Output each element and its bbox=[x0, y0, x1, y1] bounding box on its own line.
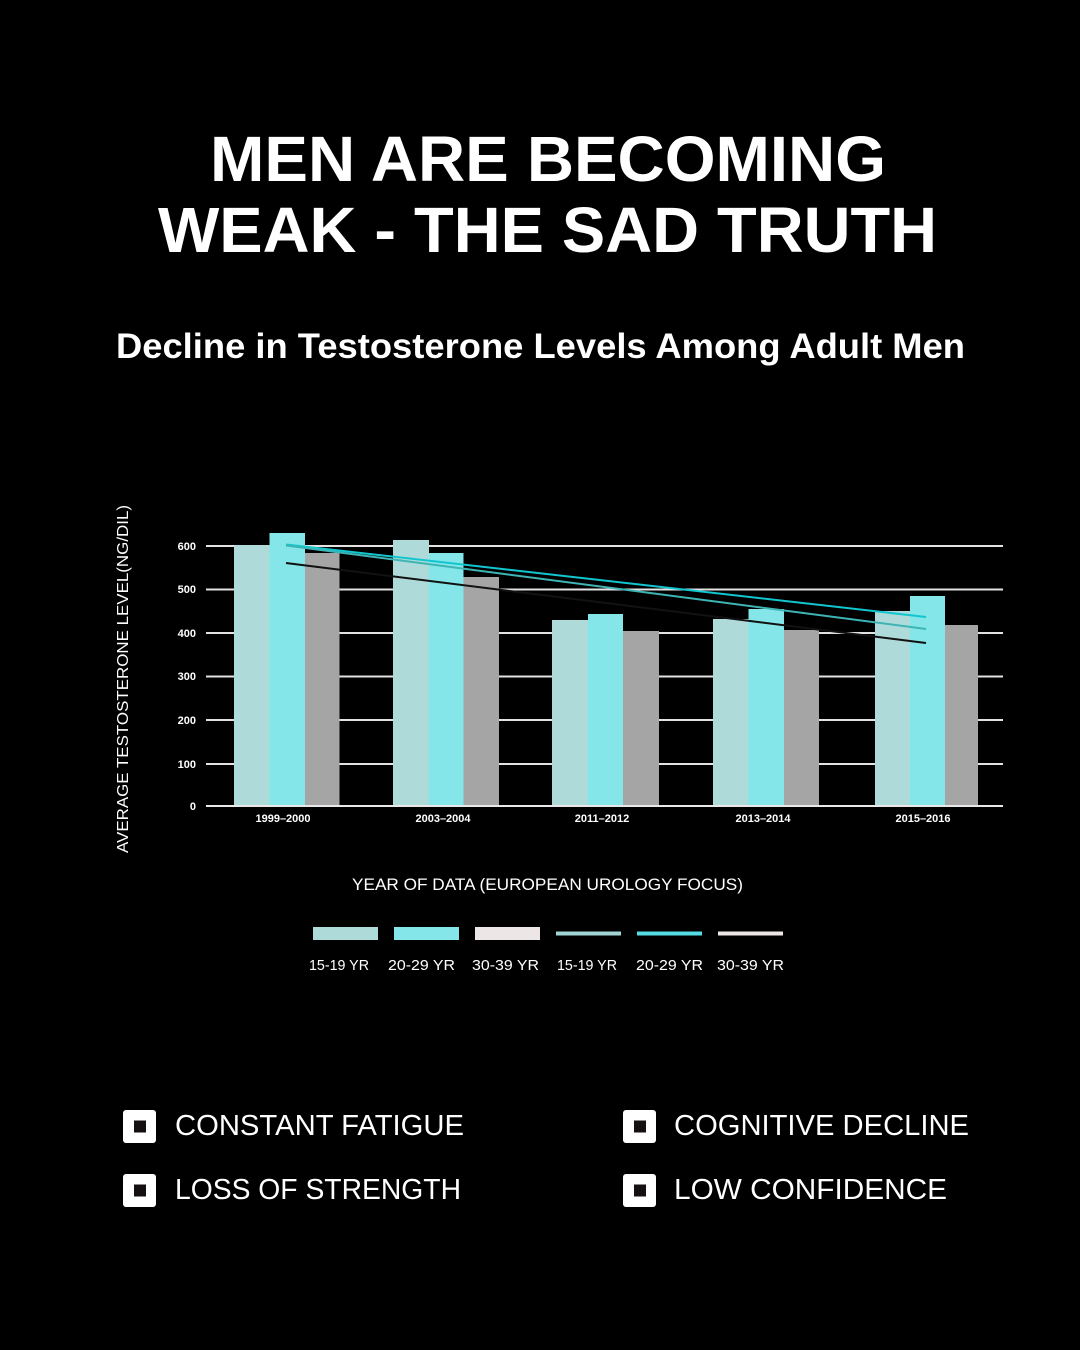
legend: 30-39 YR bbox=[717, 957, 784, 974]
y axis tick labels: 200 bbox=[178, 715, 196, 727]
x axis category labels: 2003–2004 bbox=[415, 813, 471, 825]
symptom: cognitive decline: COGNITIVE DECLINE bbox=[674, 1110, 969, 1142]
y axis tick labels: 0 bbox=[190, 801, 196, 813]
title bbox=[158, 123, 937, 266]
symptom: constant fatigue: CONSTANT FATIGUE bbox=[175, 1110, 464, 1142]
x axis category labels: 1999–2000 bbox=[255, 813, 311, 825]
title: MEN ARE BECOMING bbox=[210, 123, 886, 195]
symptom: loss of strength: LOSS OF STRENGTH bbox=[175, 1174, 461, 1206]
y axis tick labels bbox=[178, 541, 196, 813]
symptom: low confidence: LOW CONFIDENCE bbox=[674, 1174, 947, 1206]
y axis tick labels: 600 bbox=[178, 541, 196, 553]
legend: 20-29 YR bbox=[388, 957, 455, 974]
legend bbox=[309, 927, 784, 974]
bar chart bbox=[178, 533, 1003, 825]
y axis tick labels: 300 bbox=[178, 671, 196, 683]
legend: 30-39 YR bbox=[472, 957, 539, 974]
trend line: 30-39 yr bbox=[286, 563, 926, 643]
x axis category labels: 2011–2012 bbox=[575, 813, 629, 825]
bars: 2013-2014 bbox=[713, 609, 819, 806]
trend line: 20-29 yr bbox=[286, 544, 926, 617]
bars: 2003-2004 bbox=[393, 540, 499, 806]
bars: 2011-2012 bbox=[552, 614, 659, 806]
x axis category labels bbox=[255, 813, 951, 825]
bars: 2015-2016 bbox=[875, 596, 978, 806]
trend line: 15-19 yr bbox=[286, 546, 926, 629]
legend: 20-29 YR bbox=[636, 957, 703, 974]
x axis category labels: 2013–2014 bbox=[735, 813, 791, 825]
legend: 15-19 YR bbox=[557, 957, 617, 974]
bars: 1999-2000 bbox=[234, 533, 340, 806]
y axis tick labels: 500 bbox=[178, 584, 196, 596]
legend: 15-19 YR bbox=[309, 957, 369, 974]
title: WEAK - THE SAD TRUTH bbox=[158, 194, 937, 266]
y axis title: AVERAGE TESTOSTERONE LEVEL(NG/DIL) bbox=[115, 505, 132, 853]
x axis category labels: 2015–2016 bbox=[895, 813, 951, 825]
subtitle: Decline in Testosterone Levels Among Adult Men bbox=[116, 327, 965, 366]
x axis title: YEAR OF DATA (EUROPEAN UROLOGY FOCUS) bbox=[352, 876, 743, 894]
y axis tick labels: 100 bbox=[178, 759, 196, 771]
y axis tick labels: 400 bbox=[178, 628, 196, 640]
